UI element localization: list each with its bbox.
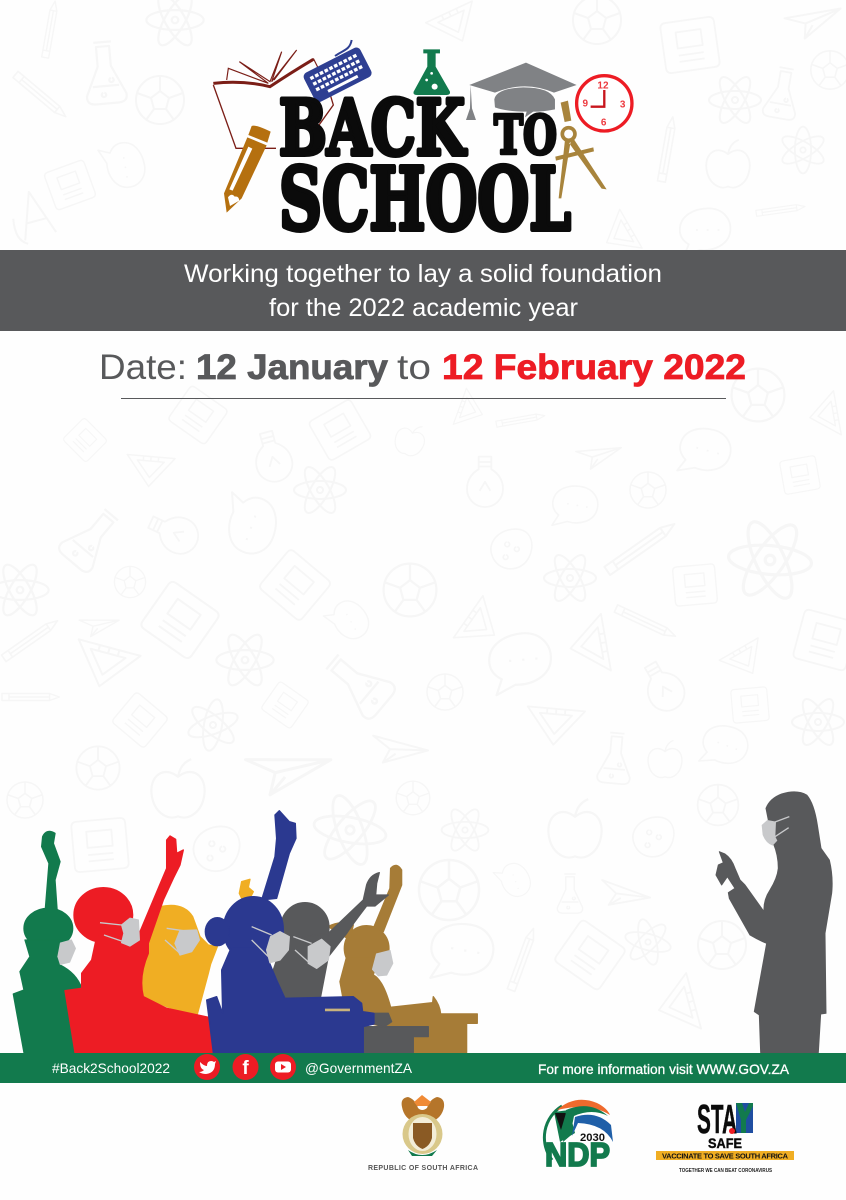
STA wordmark: STA: [697, 1096, 737, 1142]
icon: clock: [577, 76, 632, 131]
subtitle line 1: Working together to lay a solid foundation: [184, 260, 662, 288]
icon: facebook: [232, 1054, 258, 1080]
yellow banner: [656, 1151, 794, 1160]
mask: [762, 817, 789, 846]
mask: brown and grey students: [293, 937, 393, 976]
date line: 12 January: [196, 348, 389, 387]
icon: green flask: [413, 49, 450, 95]
date line: [99, 348, 746, 399]
date line: Date:: [99, 348, 187, 387]
icon: youtube: [270, 1054, 296, 1080]
illustration: teacher with mask: [716, 792, 832, 1053]
mask: blue student: [252, 927, 289, 963]
hashtag: #Back2School2022: [52, 1060, 170, 1076]
student: green: [13, 831, 82, 1053]
icon: clock: 12: [597, 81, 609, 92]
NDP: NDP: [545, 1136, 610, 1173]
student: yellow: [140, 879, 253, 1017]
date line: 12 February 2022: [442, 348, 746, 387]
illustration: students raising hands: [13, 811, 477, 1053]
website: For more information visit WWW.GOV.ZA: [538, 1061, 790, 1077]
icon: keyboard: [302, 40, 373, 104]
heart: [729, 1128, 735, 1134]
logo text: BACK: BACK: [279, 84, 467, 172]
mask: red student: [100, 918, 139, 946]
student: grey: [273, 873, 428, 1053]
banner text: VACCINATE TO SAVE SOUTH AFRICA: [662, 1152, 789, 1160]
flag letter backing: [736, 1103, 753, 1133]
subtitle band: [0, 250, 846, 331]
logo: Stay Safe campaign: [656, 1096, 794, 1174]
logo: NDP 2030: [544, 1100, 613, 1173]
subtitle line 2: for the 2022 academic year: [269, 294, 578, 322]
icon: clock: 6: [601, 118, 607, 129]
date line: to: [397, 348, 431, 387]
mask: green student: [57, 939, 76, 965]
icon: clock: 9: [583, 99, 589, 110]
icon: pencil: [224, 126, 271, 213]
mask: yellow student: [165, 928, 199, 955]
icon: facebook: f: [242, 1058, 249, 1079]
SAFE: SAFE: [708, 1135, 742, 1151]
caption: REPUBLIC OF SOUTH AFRICA: [368, 1165, 478, 1172]
logo text: SCHOOL: SCHOOL: [279, 150, 571, 250]
pencil on blue desk: [325, 1006, 350, 1014]
student: brown: [328, 865, 477, 1053]
icon: clock: 3: [620, 99, 626, 110]
logo: Back to School: [213, 40, 632, 251]
student: blue: [205, 811, 374, 1053]
icon: twitter: [194, 1054, 220, 1080]
icon: open book: [213, 50, 333, 148]
logo: coat of arms: [368, 1095, 478, 1172]
icon: graduation cap: [466, 63, 577, 120]
tagline: TOGETHER WE CAN BEAT CORONAVIRUS: [679, 1168, 772, 1174]
social handle: @GovernmentZA: [305, 1060, 413, 1076]
icon: compass: [555, 101, 607, 198]
student: red: [65, 836, 213, 1053]
logo text: TO: TO: [494, 104, 557, 166]
footer contact band: [0, 1053, 846, 1083]
2030: 2030: [580, 1132, 605, 1144]
